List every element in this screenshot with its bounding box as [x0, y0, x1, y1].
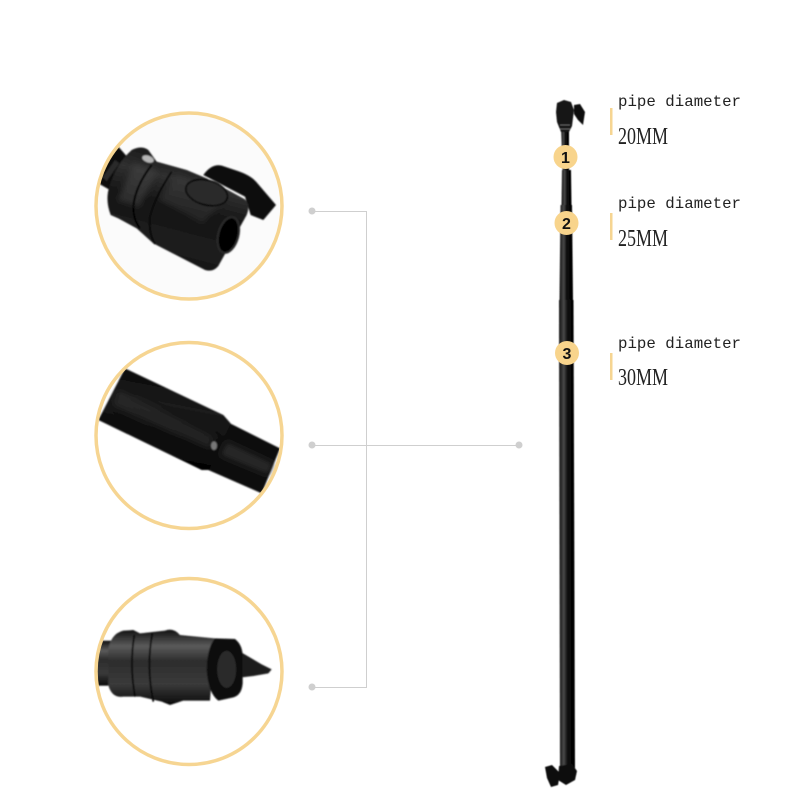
bore [216, 650, 237, 689]
screw [141, 154, 155, 164]
label: 30MM [610, 335, 741, 391]
handle tip [240, 652, 272, 677]
body [108, 630, 215, 705]
label: 20MM: 20MM [618, 124, 668, 150]
badge 3 [555, 341, 579, 365]
wing handle [203, 165, 276, 220]
end face [207, 638, 243, 701]
badge 1 [554, 145, 578, 169]
label: 25MM [610, 195, 741, 252]
badge 2 [554, 211, 578, 235]
left tube [97, 641, 113, 686]
top wing [574, 104, 585, 125]
telescopic pole [545, 100, 585, 787]
bottom wing [545, 765, 560, 787]
label: 25MM: 25MM [618, 226, 668, 252]
detail circle: clamp end [96, 578, 282, 764]
end hole [216, 216, 242, 255]
label: 30MM: 30MM [618, 365, 668, 391]
tube stub [97, 147, 130, 190]
badge 1: 1 [561, 150, 570, 167]
label: 20MM: pipe diameter [618, 93, 741, 111]
label: 25MM: pipe diameter [618, 195, 741, 213]
clamp body [107, 147, 248, 271]
label: 30MM: pipe diameter [618, 335, 741, 353]
grooves [133, 165, 152, 228]
thick tube [98, 368, 231, 470]
bottom clamp [558, 764, 577, 785]
detail circle: tube joint [96, 342, 282, 528]
badge 2: 2 [562, 216, 571, 233]
detail circle: top clamp [96, 113, 282, 299]
top clamp [556, 100, 574, 132]
top hole [184, 178, 228, 207]
shine [118, 166, 154, 209]
thin tube [208, 420, 280, 493]
connector lines [308, 208, 522, 690]
collar highlight [211, 441, 217, 450]
label: 20MM [610, 93, 741, 150]
badge 3: 3 [563, 346, 572, 363]
